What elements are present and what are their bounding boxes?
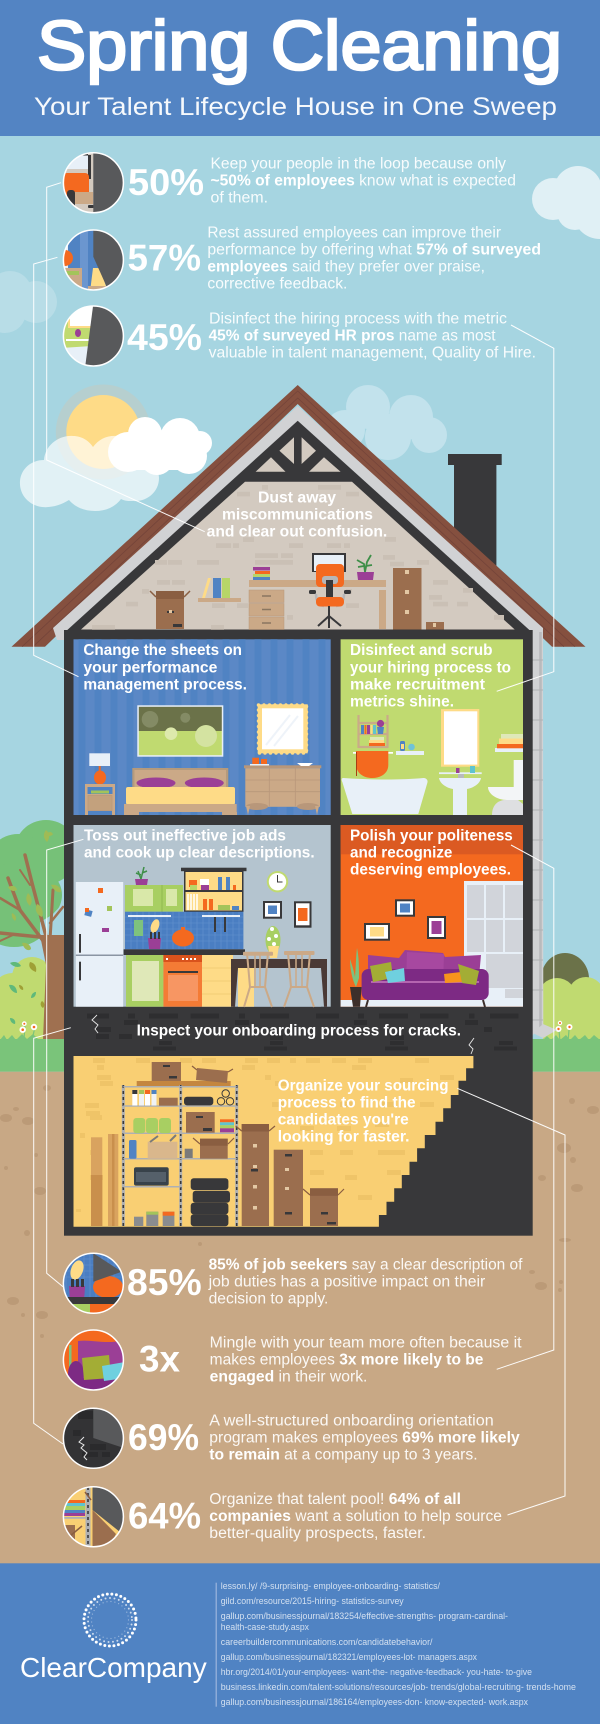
sun (56, 384, 151, 480)
caption: bathroom: your hiring process to (350, 659, 511, 676)
icon: paint cans (134, 1212, 174, 1226)
description: Keep your people in the loop because only (210, 155, 506, 172)
icon: fridge (76, 882, 123, 1007)
bushes: right (538, 953, 600, 1040)
percentage: 85% (127, 1262, 202, 1303)
description: decision to apply. (209, 1291, 328, 1308)
connector lines (34, 183, 565, 1515)
sources list: hbr.org/2014/01/your-employees- want-the- negative-feedback- you-hate- to-give (221, 1667, 532, 1677)
cloud: behind roof (325, 385, 447, 460)
icon: sink (439, 766, 482, 815)
percentage: 50% (128, 162, 204, 203)
sources list: business.linkedin.com/talent-solutions/resources/job- trends/global-recruiting- trends-home (221, 1682, 576, 1692)
percentage: 64% (128, 1495, 201, 1536)
stat: 57% (57, 224, 541, 293)
icon: shelf boxes and books (185, 1112, 234, 1159)
icon: towels on shelf (495, 734, 523, 752)
icon: spray cans (132, 1090, 178, 1106)
icon: cardboard boxes (150, 591, 190, 629)
caption: kitchen: Toss out ineffective job ads (84, 828, 286, 845)
description (209, 310, 536, 361)
icon: bathroom mirror (441, 709, 479, 767)
description: job duties has a positive impact on their (208, 1274, 485, 1291)
caption: bedroom (83, 642, 247, 693)
icon: potted plant (357, 555, 374, 580)
description (209, 1412, 520, 1463)
panel: kitchen (74, 825, 331, 1007)
icon: small box (426, 622, 444, 630)
caption: living room (350, 828, 513, 879)
caption: bedroom: management process. (83, 676, 247, 693)
flowers: right (556, 1021, 572, 1042)
icon: dining table and chairs (231, 951, 327, 1007)
icon: purple sofa (362, 950, 489, 1007)
icon: open shelves (181, 868, 246, 912)
icon: bathroom circle (62, 305, 124, 367)
caption: living room: and recognize (350, 845, 453, 862)
caption: kitchen: and cook up clear descriptions. (84, 845, 315, 862)
caption: bathroom: Disinfect and scrub (350, 642, 492, 659)
icon: window (464, 881, 523, 1000)
description: makes employees 3x more likely to be (210, 1351, 484, 1368)
description: 85% of job seekers say a clear description of (209, 1257, 523, 1274)
sources divider (216, 1583, 217, 1707)
description (210, 1334, 522, 1385)
icon: metal shelving (123, 1085, 237, 1226)
icon: top shelf boxes (137, 1062, 233, 1086)
icon: wall clock (267, 871, 288, 892)
description: engaged in their work. (210, 1368, 367, 1385)
caption: attic: Dust away (258, 489, 336, 506)
icon: computer monitor (312, 553, 346, 572)
icon: hanging orange towel (353, 751, 393, 778)
caption: attic: and clear out confusion. (207, 523, 387, 540)
icon: upper cabinets (125, 867, 183, 912)
caption: living room: Polish your politeness (350, 828, 513, 845)
sources list: gallup.com/businessjournal/182321/employees-lot- managers.aspx (221, 1652, 477, 1662)
icon: potted plant (350, 948, 362, 1007)
logo wordmark: ClearCompany (20, 1652, 207, 1683)
icon: sofa circle (62, 1329, 124, 1391)
sources list: careerbuildercommunications.com/candidatebehavior/ (221, 1637, 433, 1647)
icon: tall cardboard boxes (236, 1124, 344, 1226)
description: of them. (210, 189, 268, 206)
house frame (64, 421, 533, 1236)
stat: 50% (62, 152, 515, 214)
caption: basement: looking for faster. (278, 1129, 410, 1146)
floor (341, 1000, 523, 1007)
ground: grass (0, 1034, 600, 1072)
sources list (221, 1581, 576, 1707)
cloud: translucent in front of sun (20, 436, 159, 511)
sources list: lesson.ly/ /9-surprising- employee-onboarding- statistics/ (221, 1581, 440, 1591)
icon: right crack (469, 1038, 474, 1054)
caption: basement (278, 1078, 448, 1146)
icon: tire stack (191, 1178, 230, 1226)
description (207, 224, 541, 292)
icon: left crack (92, 1015, 98, 1033)
description: program makes employees 69% more likely (209, 1429, 520, 1446)
caption: bedroom: your performance (83, 659, 218, 676)
description: Disinfect the hiring process with the metric (209, 310, 507, 327)
icon: blue backsplash (125, 912, 243, 949)
cloud: white (108, 417, 212, 475)
icon: kitchen pictures (263, 901, 312, 928)
stat: 64% (60, 1485, 502, 1549)
stat: 85% (60, 1250, 523, 1316)
icon: bed (124, 768, 237, 815)
description: performance by offering what 57% of surveyed (207, 241, 541, 258)
header band (0, 0, 600, 136)
description: to remain at a company up to 3 years. (209, 1446, 478, 1463)
icon: tall box stack (393, 568, 422, 630)
icon: stacked books (253, 567, 270, 580)
foundation bricks (87, 1014, 518, 1050)
sources list: gallup.com/businessjournal/183254/effective-strengths- program-cardinal- (221, 1611, 508, 1621)
icon: flower vase (266, 926, 280, 958)
icon: bathtub (342, 778, 428, 814)
icon: scalloped mirror (258, 704, 308, 753)
roof (12, 385, 586, 647)
icon: toilet (488, 760, 523, 815)
icon: countertop and lower cabinets (124, 949, 245, 1007)
cloud: faint left (0, 271, 57, 333)
flowers: left (20, 1021, 37, 1040)
logo mark (84, 1594, 136, 1646)
percentage: 45% (127, 317, 202, 358)
icon: stove (163, 955, 202, 1007)
footer band (0, 1563, 600, 1724)
sky background (0, 136, 600, 1046)
icon: lamp (89, 753, 110, 784)
icon: coiled hose and rings (184, 1090, 234, 1105)
title: Spring Cleaning (37, 6, 562, 84)
cloud: top right (532, 166, 600, 239)
icon: office circle (62, 152, 124, 214)
description (209, 1491, 502, 1542)
multiplier: 3x (139, 1339, 180, 1380)
percentage: 57% (128, 238, 201, 279)
caption: foundation: Inspect your onboarding process for cracks. (137, 1023, 461, 1040)
icon: wall shelf with binders (198, 578, 241, 602)
description: A well-structured onboarding orientation (209, 1412, 494, 1429)
description: corrective feedback. (207, 275, 347, 292)
description: Organize that talent pool! 64% of all (209, 1491, 461, 1508)
panel: living room (341, 825, 523, 1007)
room captions (83, 489, 513, 1146)
icon: towel shelf (358, 715, 388, 748)
caption: attic: miscommunications (222, 506, 373, 523)
caption: bathroom: metrics shine. (350, 693, 454, 710)
panel: basement (74, 1056, 473, 1227)
caption: bathroom (350, 642, 511, 710)
roof truss (256, 437, 341, 472)
description: companies want a solution to help source (209, 1508, 502, 1525)
tree: left (0, 820, 78, 1040)
icon: orange office chair (309, 564, 351, 628)
ground: soil (0, 1072, 600, 1564)
caption: basement: Organize your sourcing (278, 1078, 448, 1095)
panel: bedroom (74, 639, 331, 815)
description (210, 155, 516, 206)
caption: attic (207, 489, 387, 540)
icon: dresser (244, 758, 321, 815)
caption: living room: deserving employees. (350, 862, 511, 879)
icon: living room pictures (364, 899, 446, 941)
basement bricks (76, 1058, 454, 1212)
description: ~50% of employees know what is expected (210, 172, 516, 189)
stat: 3x (60, 1328, 522, 1392)
icon: bedroom circle (62, 229, 124, 291)
description: 45% of surveyed HR pros name as most (209, 327, 496, 344)
subtitle: Your Talent Lifecycle House in One Sweep (34, 93, 557, 121)
icon: cracked foundation circle (62, 1408, 124, 1469)
icon: green jars (133, 1118, 171, 1133)
icon: bottle shelf (396, 741, 424, 755)
stat: 69% (60, 1406, 520, 1471)
caption: bedroom: Change the sheets on (83, 642, 242, 659)
percentage: 69% (128, 1417, 199, 1458)
description: Rest assured employees can improve their (207, 224, 501, 241)
caption: basement: process to find the (278, 1095, 416, 1112)
caption: basement: candidates you're (278, 1112, 409, 1129)
description: employees said they prefer over praise, (207, 258, 485, 275)
stat: 45% (60, 304, 536, 368)
caption: kitchen (84, 828, 315, 862)
panel: attic (81, 482, 515, 630)
house (12, 385, 586, 1236)
sources list: gallup.com/businessjournal/186164/employees-don- know-expected- work.aspx (221, 1697, 528, 1707)
description: better-quality prospects, faster. (209, 1525, 426, 1542)
caption: bathroom: make recruitment (350, 676, 485, 693)
icon: nightstand (85, 784, 115, 815)
icon: kitchen circle (62, 1252, 124, 1314)
icon: desk with drawers (249, 580, 386, 630)
chimney (448, 454, 502, 570)
sources list: gild.com/resource/2015-hiring- statistics-survey (221, 1596, 404, 1606)
fascia and downpipe (53, 406, 557, 1038)
panel: bathroom (341, 639, 523, 815)
icon: tool box and blue bottle (129, 1135, 177, 1186)
description: Mingle with your team more often because it (210, 1334, 522, 1351)
soil pebbles (0, 1085, 599, 1338)
icon: landscape painting (137, 705, 223, 757)
icon: wood planks (91, 1134, 118, 1226)
attic bricks (92, 485, 504, 630)
description: valuable in talent management, Quality of Hire. (209, 344, 536, 361)
icon: basement shelf circle (62, 1486, 124, 1548)
sources list: health-case-study.aspx (221, 1622, 309, 1632)
description (208, 1257, 523, 1308)
